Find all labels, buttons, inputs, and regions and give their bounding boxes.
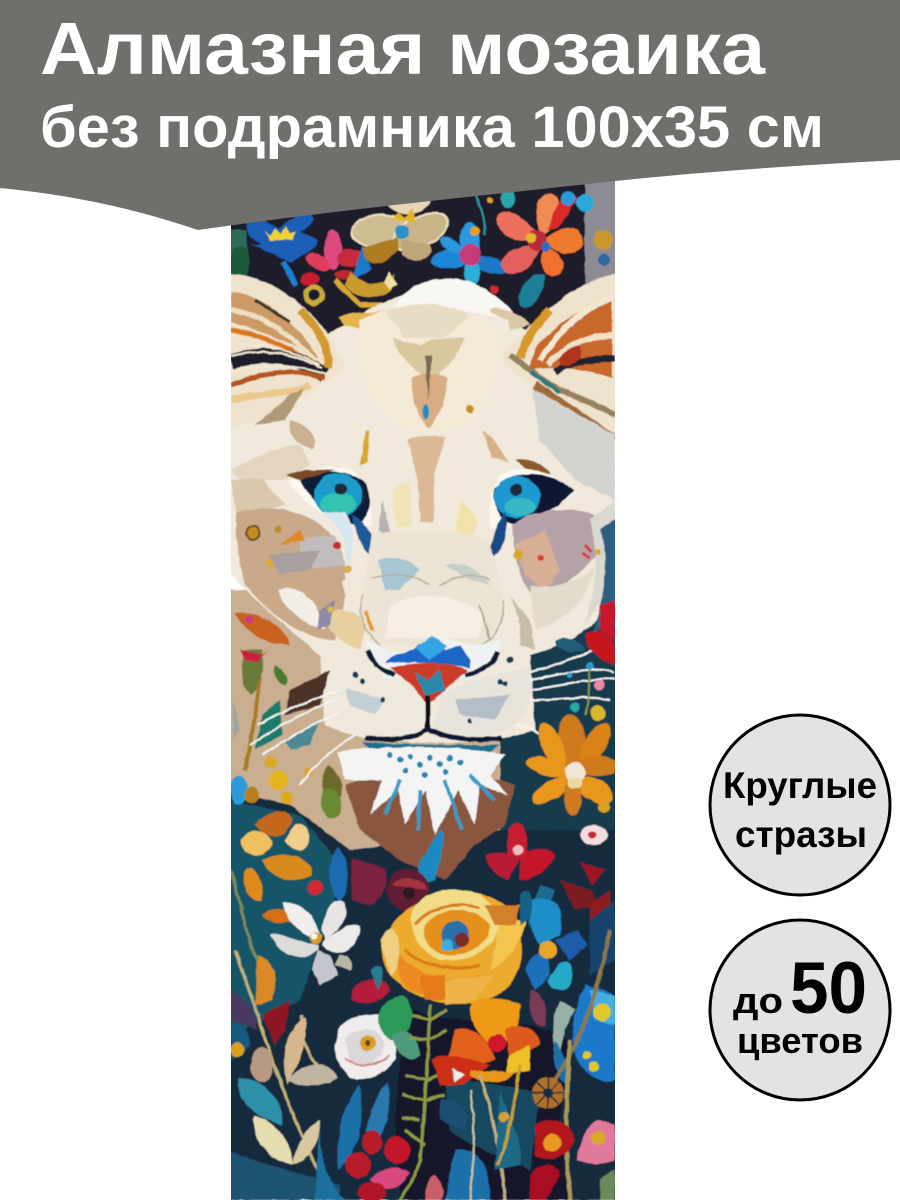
header banner xyxy=(0,0,900,230)
flower: pink xyxy=(301,230,385,305)
flower: blue right xyxy=(520,891,615,990)
title line 1: Алмазная мозаика xyxy=(40,7,766,90)
leaf blue xyxy=(330,847,348,902)
flower: blue right edge xyxy=(553,985,615,1085)
badge: up to 50 colours xyxy=(710,920,890,1100)
right cheek xyxy=(505,500,620,650)
leaf maroon xyxy=(352,858,386,905)
left ear xyxy=(225,274,385,430)
lion head base xyxy=(225,290,620,743)
rosebud xyxy=(352,966,390,1003)
left bottom stems and orange leaf xyxy=(231,870,319,1171)
fern xyxy=(400,1005,447,1200)
flower: orange marigold xyxy=(524,713,619,816)
right eye xyxy=(489,460,575,528)
whiskers xyxy=(250,645,615,785)
flower: red and pink bottom right xyxy=(530,1120,615,1200)
beige leaves xyxy=(251,1017,337,1165)
flower: left yellow cluster xyxy=(230,770,341,923)
flower: blue and pink xyxy=(430,196,506,291)
daisy xyxy=(532,1077,564,1109)
leaf teal mid xyxy=(418,831,444,883)
title line 2: без подрамника 100х35 см xyxy=(40,95,824,160)
forehead markings xyxy=(231,304,615,528)
badge: up to 50 colours: цветов xyxy=(737,1020,863,1061)
right ear xyxy=(490,274,620,445)
painting: lioness among flowers xyxy=(225,170,620,1200)
crown of head xyxy=(393,278,514,318)
eye blue streaks xyxy=(320,500,508,566)
left side foliage xyxy=(233,613,342,810)
muzzle and mouth xyxy=(325,657,532,752)
nose xyxy=(365,636,500,702)
left cheek xyxy=(236,508,365,650)
badge: round rhinestones: стразы xyxy=(735,814,867,855)
badge: round rhinestones: Круглые xyxy=(723,765,877,806)
badge: round rhinestones xyxy=(710,715,890,895)
teal leaf xyxy=(238,1078,282,1125)
flower: blue top left xyxy=(230,214,318,285)
mane brown xyxy=(345,774,515,880)
flower: beige butterfly xyxy=(344,200,450,298)
green leaves xyxy=(378,996,420,1059)
flower: red xyxy=(485,823,610,935)
flower: big peony xyxy=(380,889,527,1005)
badge: up to 50 colours: 50 xyxy=(790,948,867,1029)
flower: white xyxy=(270,900,360,985)
right side dots and red flower xyxy=(555,600,615,721)
flower: white rose xyxy=(335,1014,396,1079)
rose dark xyxy=(387,869,429,911)
left eye xyxy=(285,467,372,526)
snout xyxy=(361,530,503,645)
flower: orange-red xyxy=(487,190,613,308)
chin fur xyxy=(338,747,508,835)
flower: poppy xyxy=(432,990,546,1085)
painting background top xyxy=(225,170,620,1200)
leaves blue bottom xyxy=(315,930,610,1200)
badge: up to 50 colours: до xyxy=(733,980,783,1021)
flower: red bottom centre xyxy=(345,1130,443,1200)
